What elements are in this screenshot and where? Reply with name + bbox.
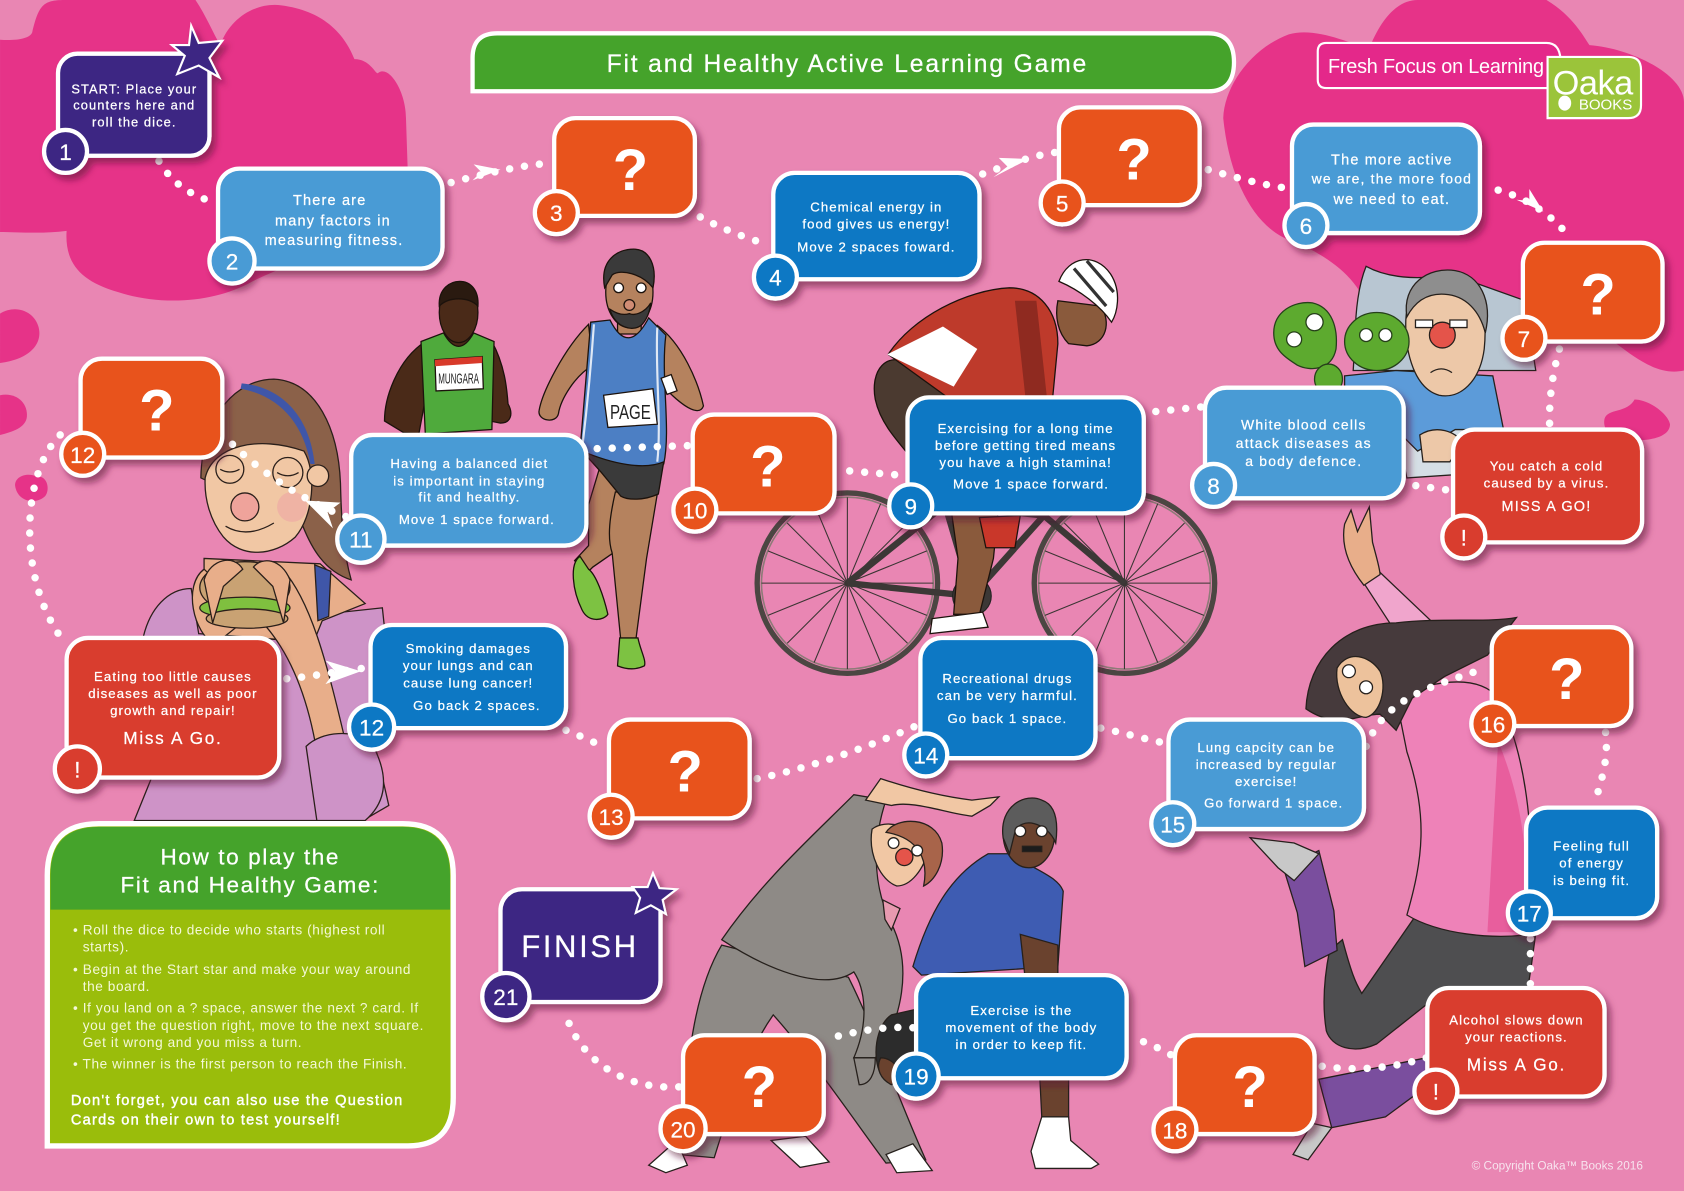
badge exclamation: ! <box>74 758 80 783</box>
space 21: finish: FINISH <box>521 929 639 964</box>
space 6: we are, the more food <box>1311 171 1472 187</box>
badge 4: 4 <box>769 266 782 291</box>
space 1: start: counters here and <box>73 98 195 113</box>
badge 8 <box>1192 464 1235 507</box>
space 19: in order to keep fit. <box>955 1037 1087 1052</box>
space 8: attack diseases as <box>1236 435 1372 451</box>
badge 6 <box>1284 204 1327 247</box>
illustration: runner Mungara: MUNGARA <box>438 370 479 387</box>
star: finish <box>633 873 677 914</box>
space 2: many factors in <box>275 214 391 230</box>
badge 10: 10 <box>682 499 707 524</box>
badge 7: 7 <box>1518 327 1530 352</box>
logo: Oaka Books: Oaka <box>1553 65 1634 103</box>
space 15: Lung capcity can be <box>1197 740 1335 755</box>
title banner <box>473 33 1234 91</box>
miss a go: alcohol: Alcohol slows down <box>1449 1013 1584 1028</box>
badge 9: 9 <box>904 494 917 519</box>
space 5: question <box>1041 107 1200 224</box>
rules list: the board. <box>83 979 150 994</box>
space 15: Go forward 1 space. <box>1204 796 1343 811</box>
space 3: question <box>535 118 695 234</box>
badge exclamation <box>1442 515 1485 558</box>
miss a go: eating too little <box>55 638 279 791</box>
dotted path: whole game trail <box>30 152 1606 1087</box>
rules list: starts). <box>83 940 129 955</box>
space 17: is being fit. <box>1553 873 1630 888</box>
space 12: question <box>61 359 222 476</box>
badge 7 <box>1502 317 1545 360</box>
space 3: question: ? <box>613 139 648 203</box>
space 9: Exercising for a long time <box>938 421 1114 436</box>
space 17: Feeling full <box>1553 839 1630 854</box>
miss a go: alcohol <box>1414 988 1604 1113</box>
space 13: question <box>590 720 750 838</box>
space 13: question: ? <box>667 740 703 804</box>
space 12: smoking: cause lung cancer! <box>403 675 533 690</box>
space 14 <box>904 638 1095 776</box>
badge exclamation: ! <box>1433 1080 1439 1105</box>
rules list: • The winner is the first person to reach the Finish. <box>73 1057 407 1072</box>
space 11: Having a balanced diet <box>390 456 548 471</box>
badge 16 <box>1471 702 1514 745</box>
badge 20: 20 <box>671 1117 696 1142</box>
space 2 <box>209 169 442 284</box>
space 8 <box>1192 388 1404 507</box>
space 10: question <box>673 415 834 532</box>
space 16: question: ? <box>1549 648 1585 712</box>
illustration: virus germs <box>1274 303 1409 394</box>
illustration: cyclist <box>874 260 1118 634</box>
illustration: girl eating a sandwich <box>134 379 389 820</box>
space 7: question: ? <box>1580 264 1616 328</box>
space 12: question: ? <box>139 380 175 444</box>
space 9: before getting tired means <box>935 438 1116 453</box>
badge 19: 19 <box>904 1065 929 1090</box>
space 12: smoking: Smoking damages <box>406 641 531 656</box>
logo: Fresh Focus on Learning tagline: Fresh Focus on Learning <box>1328 56 1544 78</box>
space 14: can be very harmful. <box>937 688 1078 703</box>
space 7: question <box>1502 243 1662 360</box>
miss a go: alcohol: your reactions. <box>1465 1030 1568 1045</box>
badge 16: 16 <box>1480 712 1505 737</box>
logo: Oaka Books <box>1548 57 1641 118</box>
space 10: question: ? <box>750 435 786 499</box>
badge 13: 13 <box>599 805 624 830</box>
illustration: runner Page: PAGE <box>610 402 651 424</box>
illustration: runner Mungara <box>385 281 511 434</box>
space 9: Move 1 space forward. <box>953 477 1109 492</box>
miss a go: cold: caused by a virus. <box>1484 476 1609 491</box>
space 6: we need to eat. <box>1332 192 1450 208</box>
space 11: is important in staying <box>393 473 545 488</box>
space 14: Recreational drugs <box>942 671 1072 686</box>
badge 3: 3 <box>550 201 563 226</box>
title banner: Fit and Healthy Active Learning Game <box>607 51 1088 78</box>
badge 18: 18 <box>1162 1118 1187 1143</box>
space 15: exercise! <box>1235 774 1297 789</box>
badge exclamation <box>1414 1070 1457 1113</box>
miss a go: cold: MISS A GO! <box>1502 499 1591 515</box>
space 20: question <box>661 1035 824 1151</box>
magenta cloud: top left <box>0 0 408 301</box>
space 4: food gives us energy! <box>802 217 950 232</box>
space 6: The more active <box>1331 152 1453 168</box>
space 12: smoking: your lungs and can <box>403 658 534 673</box>
star: start <box>172 26 222 77</box>
badge 14: 14 <box>913 744 938 769</box>
reminder note <box>71 1093 403 1128</box>
badge 19 <box>894 1054 939 1099</box>
badge 3 <box>535 191 578 234</box>
badge 12 <box>349 705 394 750</box>
space 2: measuring fitness. <box>265 233 403 249</box>
heading: how to play: Fit and Healthy Game: <box>121 872 380 897</box>
miss a go: eating too little: diseases as well as poor <box>88 686 258 701</box>
badge 21 <box>482 973 529 1020</box>
space 19 <box>894 975 1127 1099</box>
space 11: fit and healthy. <box>418 490 520 505</box>
heading: how to play: How to play the <box>160 845 340 870</box>
badge 5 <box>1041 181 1084 224</box>
rules list: • If you land on a ? space, answer the next ? card. If <box>73 1001 419 1016</box>
badge 17: 17 <box>1517 901 1542 926</box>
logo: Oaka Books: BOOKS <box>1579 97 1632 114</box>
space 9 <box>889 397 1144 527</box>
arrow: path direction 4 to 5 <box>993 158 1029 177</box>
space 11: Move 1 space forward. <box>399 512 555 527</box>
small magenta clouds <box>0 309 1670 501</box>
badge 12: 12 <box>70 443 95 468</box>
badge 20 <box>661 1106 706 1151</box>
badge 17 <box>1508 891 1551 934</box>
space 18: question: ? <box>1232 1056 1268 1120</box>
arrow: path direction 12 to 12 <box>325 660 361 684</box>
space 14: Go back 1 space. <box>947 711 1067 726</box>
space 17: of energy <box>1559 856 1624 871</box>
miss a go: cold: You catch a cold <box>1490 458 1603 473</box>
badge 18 <box>1153 1108 1196 1151</box>
rules list <box>73 922 424 1072</box>
space 1: start: roll the dice. <box>92 115 176 130</box>
space 6 <box>1284 125 1480 247</box>
panel: how to play <box>47 824 453 1146</box>
arrow: path direction 6 to 7 <box>1516 189 1543 212</box>
badge exclamation <box>55 746 100 791</box>
logo: Fresh Focus on Learning tagline <box>1318 43 1560 88</box>
reminder note: Don't forget, you can also use the Question <box>71 1093 403 1109</box>
space 9: you have a high stamina! <box>939 455 1112 470</box>
space 5: question: ? <box>1116 128 1152 192</box>
space 15 <box>1151 720 1364 845</box>
arrow: path direction 11 to 12 <box>305 500 340 528</box>
badge 14 <box>904 734 947 776</box>
badge 11: 11 <box>349 528 373 553</box>
badge 12: 12 <box>359 716 384 741</box>
space 17 <box>1508 808 1657 934</box>
badge 11 <box>337 515 385 563</box>
badge 15: 15 <box>1160 812 1185 837</box>
space 19: Exercise is the <box>970 1003 1072 1018</box>
illustration: jumping girl <box>1250 507 1536 1160</box>
badge 5: 5 <box>1056 192 1068 217</box>
space 8: a body defence. <box>1245 453 1362 469</box>
space 18: question <box>1153 1035 1315 1151</box>
rules list: • Roll the dice to decide who starts (highest roll <box>73 922 385 937</box>
badge 1 <box>44 130 87 173</box>
badge 15 <box>1151 802 1194 845</box>
space 19: movement of the body <box>945 1020 1097 1035</box>
badge 13 <box>590 795 633 838</box>
badge 2 <box>209 238 255 284</box>
arrow: path direction 2 to 3 <box>473 164 500 180</box>
space 4: Move 2 spaces foward. <box>797 239 955 254</box>
illustration: runner Page <box>539 249 703 669</box>
illustration: sick man in bed <box>1345 266 1536 478</box>
magenta cloud: top right <box>1223 0 1684 372</box>
badge exclamation: ! <box>1461 526 1467 551</box>
miss a go: eating too little: growth and repair! <box>110 703 236 718</box>
space 12: smoking: Go back 2 spaces. <box>413 698 541 713</box>
rules list: • Begin at the Start star and make your way around <box>73 962 411 977</box>
miss a go: eating too little: Eating too little causes <box>94 669 252 684</box>
illustration: stretching man <box>876 798 1099 1168</box>
badge 10 <box>673 489 716 532</box>
rules list: you get the question right, move to the next square. <box>83 1018 424 1033</box>
badge 9 <box>889 484 932 527</box>
space 15: increased by regular <box>1196 757 1337 772</box>
illustration: bicycle <box>757 493 1215 673</box>
space 1: start <box>44 26 222 173</box>
badge 21: 21 <box>493 985 518 1010</box>
copyright: © Copyright Oaka™ Books 2016 <box>1472 1159 1643 1173</box>
miss a go: cold <box>1442 430 1642 558</box>
badge 4 <box>754 256 797 299</box>
space 4 <box>754 173 979 299</box>
miss a go: alcohol: Miss A Go. <box>1467 1055 1566 1075</box>
space 8: White blood cells <box>1241 417 1367 433</box>
space 21: finish <box>482 873 677 1020</box>
heading: how to play <box>121 845 380 897</box>
badge 8: 8 <box>1207 474 1220 499</box>
space 4: Chemical energy in <box>810 200 942 215</box>
space 20: question: ? <box>742 1056 777 1120</box>
space 16: question <box>1471 627 1631 745</box>
space 1: start: START: Place your <box>71 81 197 96</box>
rules list: Get it wrong and you miss a turn. <box>83 1035 302 1050</box>
badge 2: 2 <box>226 250 238 275</box>
space 11 <box>337 435 586 563</box>
badge 12 <box>61 433 104 476</box>
space 12: smoking <box>349 625 566 750</box>
reminder note: Cards on their own to test yourself! <box>71 1112 341 1128</box>
badge 6: 6 <box>1300 214 1312 239</box>
badge 1: 1 <box>59 140 72 165</box>
miss a go: eating too little: Miss A Go. <box>123 728 223 748</box>
illustration: stretching woman <box>649 779 999 1173</box>
space 2: There are <box>293 193 366 209</box>
